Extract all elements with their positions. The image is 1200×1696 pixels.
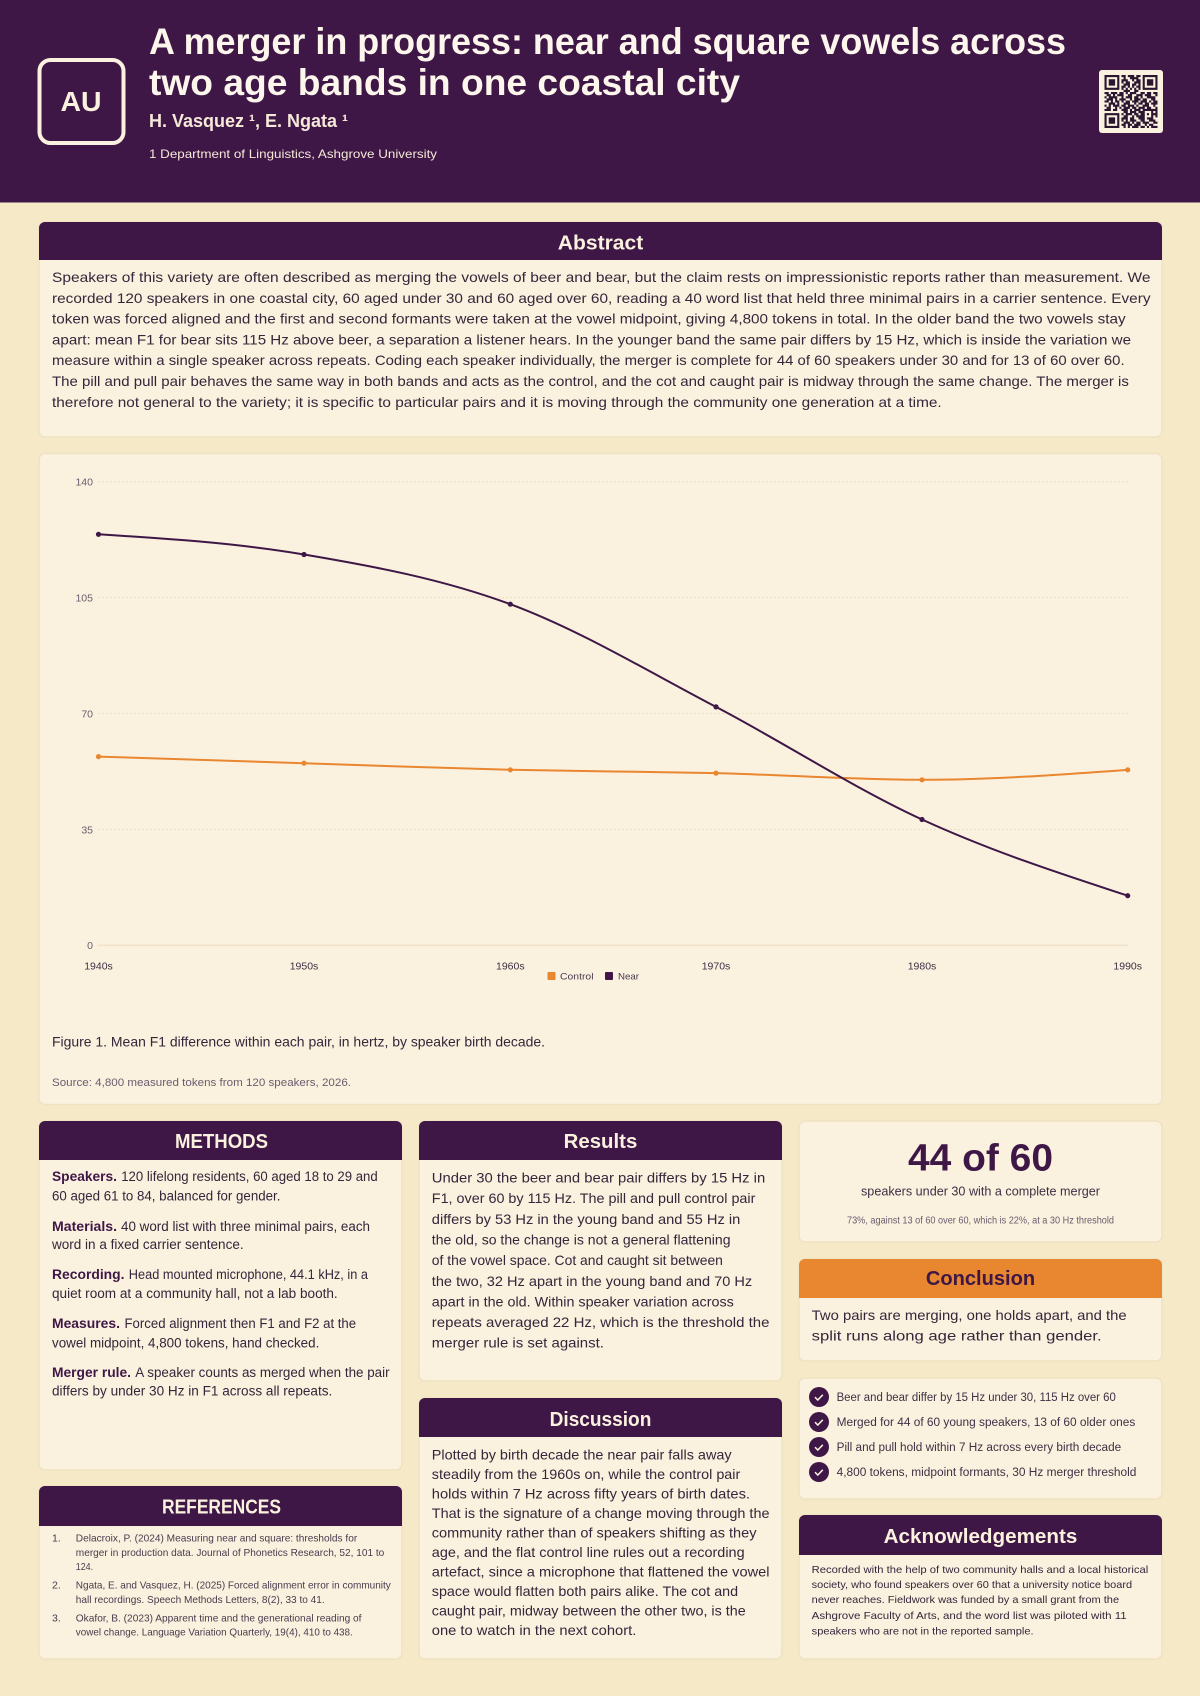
discussion text: caught pair, midway between the other two, is the	[432, 1603, 746, 1619]
y axis labels: 105	[75, 592, 93, 604]
x axis labels: 1980s	[908, 960, 936, 972]
title: two age bands in one coastal city	[149, 62, 740, 103]
panel: key statistic	[799, 1121, 1162, 1242]
panel: abstract	[39, 222, 1162, 437]
stat note: 73%, against 13 of 60 over 60, which is 22%, at a 30 Hz threshold	[847, 1216, 1114, 1226]
check item 2: Merged for 44 of 60 young speakers, 13 of 60 older ones	[837, 1417, 1136, 1429]
methods text: quiet room at a community hall, not a lab booth.	[52, 1286, 338, 1301]
acknowledgements text: never reaches. Fieldwork was funded by a small grant from the	[812, 1594, 1119, 1606]
heading: references: REFERENCES	[162, 1496, 281, 1518]
methods text: differs by under 30 Hz in F1 across all repeats.	[52, 1383, 332, 1398]
abstract text: The pill and pull pair behaves the same way in both bands and acts as the control, and the cot and caught pair is midway through the same change. The merger is	[52, 373, 1129, 389]
figure caption: Figure 1. Mean F1 difference within each pair, in hertz, by speaker birth decade.	[52, 1034, 545, 1050]
methods text: Head mounted microphone, 44.1 kHz, in a	[129, 1267, 368, 1282]
references list: 2.	[52, 1580, 61, 1592]
title: A merger in progress: near and square vowels across	[149, 21, 1066, 62]
methods text: Forced alignment then F1 and F2 at the	[124, 1316, 356, 1331]
discussion text: artefact, since a microphone that flattened the vowel	[432, 1564, 770, 1580]
acknowledgements text: Ashgrove Faculty of Arts, and the word list was piloted with 11	[812, 1610, 1127, 1622]
legend	[548, 972, 639, 982]
check item 3	[809, 1437, 1121, 1457]
discussion text: space would flatten both pairs alike. The cot and	[432, 1583, 738, 1599]
series: near	[96, 532, 1130, 898]
references list: 1.	[52, 1532, 61, 1544]
x axis labels: 1970s	[702, 960, 730, 972]
references list: Okafor, B. (2023) Apparent time and the generational reading of	[76, 1612, 362, 1624]
panel: discussion	[419, 1398, 782, 1659]
x axis labels	[84, 960, 1142, 972]
results text: merger rule is set against.	[432, 1335, 604, 1351]
authors: H. Vasquez ¹, E. Ngata ¹	[149, 111, 348, 131]
abstract text: Speakers of this variety are often described as merging the vowels of beer and bear, but the claim rests on impressionistic reports rather than measurement. We	[52, 269, 1151, 285]
panel: figure	[39, 454, 1162, 1104]
methods text: 120 lifelong residents, 60 aged 18 to 29 and	[121, 1169, 378, 1184]
references list: 3.	[52, 1612, 61, 1624]
y axis labels	[75, 476, 93, 952]
heading: results: Results	[564, 1131, 637, 1153]
methods text: Merger rule.	[52, 1365, 131, 1380]
conclusion text	[812, 1307, 1127, 1344]
discussion text: age, and the flat control line rules out a recording	[432, 1544, 745, 1560]
results text: F1, over 60 by 115 Hz. The pill and pull control pair	[432, 1190, 756, 1206]
y axis labels: 140	[75, 476, 93, 488]
abstract text: measure within a single speaker across repeats. Coding each speaker individually, the merger is complete for 44 of 60 speakers under 30 and for 13 of 60 over 60.	[52, 352, 1125, 368]
abstract text: token was forced aligned and the first and second formants were taken at the vowel midpoint, giving 4,800 tokens in total. In the older band the two vowels stay	[52, 311, 1126, 327]
methods text	[51, 1169, 390, 1398]
legend: Control	[560, 972, 594, 982]
results text: Under 30 the beer and bear pair differs by 15 Hz in	[432, 1170, 765, 1186]
discussion text	[432, 1447, 770, 1638]
discussion text: holds within 7 Hz across fifty years of birth dates.	[432, 1486, 750, 1502]
references list: hall recordings. Speech Methods Letters, 8(2), 33 to 41.	[76, 1594, 325, 1606]
panel: acknowledgements	[799, 1515, 1162, 1659]
conclusion text: split runs along age rather than gender.	[812, 1328, 1102, 1344]
y axis labels: 0	[87, 940, 93, 952]
x axis labels: 1990s	[1113, 960, 1142, 972]
check item 4: 4,800 tokens, midpoint formants, 30 Hz merger threshold	[837, 1467, 1136, 1479]
x axis labels: 1940s	[84, 960, 113, 972]
acknowledgements text: society, who found speakers over 60 that a university notice board	[812, 1579, 1132, 1591]
methods text: vowel midpoint, 4,800 tokens, hand checked.	[52, 1336, 319, 1351]
heading: abstract: Abstract	[558, 232, 644, 254]
series: control	[96, 754, 1130, 782]
acknowledgements text: speakers who are not in the reported sample.	[812, 1626, 1034, 1638]
abstract text: recorded 120 speakers in one coastal city, 60 aged under 30 and 60 aged over 60, reading a 40 word list that held three minimal pairs in a carrier sentence. Every	[52, 290, 1150, 306]
results text: differs by 53 Hz in the young band and 55 Hz in	[432, 1211, 740, 1227]
heading: conclusion: Conclusion	[926, 1268, 1035, 1290]
source note: Source: 4,800 measured tokens from 120 speakers, 2026.	[52, 1077, 351, 1089]
results text: of the vowel space. Cot and caught sit between	[432, 1252, 723, 1268]
discussion text: Plotted by birth decade the near pair falls away	[432, 1447, 732, 1463]
references list: merger in production data. Journal of Phonetics Research, 52, 101 to	[76, 1547, 384, 1559]
stat label: speakers under 30 with a complete merger	[861, 1184, 1100, 1198]
references list: 124.	[76, 1561, 93, 1573]
discussion text: one to watch in the next cohort.	[432, 1622, 636, 1638]
panel: references	[39, 1486, 402, 1659]
abstract text: therefore not general to the variety; it is specific to particular pairs and it is moving through the community one generation at a time.	[52, 394, 942, 410]
acknowledgements text: Recorded with the help of two community halls and a local historical	[812, 1564, 1148, 1576]
methods text: Measures.	[52, 1316, 120, 1331]
check item 2	[809, 1412, 1136, 1432]
panel: key findings checklist	[799, 1378, 1162, 1499]
acknowledgements text	[812, 1564, 1148, 1638]
methods text: Speakers.	[52, 1169, 117, 1184]
methods text: 40 word list with three minimal pairs, each	[121, 1219, 370, 1234]
discussion text: That is the signature of a change moving through the	[432, 1505, 770, 1521]
heading: methods: METHODS	[175, 1131, 268, 1153]
results text: the two, 32 Hz apart in the young band and 70 Hz	[432, 1273, 752, 1289]
references list: Delacroix, P. (2024) Measuring near and square: thresholds for	[76, 1532, 358, 1544]
x axis labels: 1950s	[290, 960, 318, 972]
check item 4	[809, 1462, 1136, 1482]
panel: methods	[39, 1121, 402, 1470]
references list: Ngata, E. and Vasquez, H. (2025) Forced alignment error in community	[76, 1580, 392, 1592]
check item 1: Beer and bear differ by 15 Hz under 30, 115 Hz over 60	[837, 1392, 1116, 1404]
conclusion text: Two pairs are merging, one holds apart, and the	[812, 1307, 1127, 1323]
check item 3: Pill and pull hold within 7 Hz across every birth decade	[837, 1442, 1121, 1454]
abstract text: apart: mean F1 for bear sits 115 Hz above beer, a separation a listener hears. In the younger band the same pair differs by 15 Hz, which is inside the variation we	[52, 331, 1131, 347]
x axis labels: 1960s	[496, 960, 525, 972]
results text: the old, so the change is not a general flattening	[432, 1232, 730, 1248]
title	[149, 21, 1066, 103]
stat value: 44 of 60	[908, 1138, 1053, 1180]
panel: conclusion	[799, 1259, 1162, 1361]
heading: discussion: Discussion	[550, 1409, 651, 1431]
QR code	[1099, 70, 1163, 133]
header banner	[0, 0, 1200, 202]
logo: AU	[40, 60, 124, 143]
check item 1	[809, 1387, 1116, 1407]
methods text: A speaker counts as merged when the pair	[135, 1365, 390, 1380]
affiliation: 1 Department of Linguistics, Ashgrove University	[149, 147, 437, 161]
methods text: word in a fixed carrier sentence.	[51, 1237, 244, 1252]
references list	[52, 1532, 392, 1639]
y axis labels: 35	[81, 824, 93, 836]
references list: vowel change. Language Variation Quarterly, 19(4), 410 to 438.	[76, 1627, 353, 1639]
y axis labels: 70	[81, 708, 93, 720]
methods text: 60 aged 61 to 84, balanced for gender.	[52, 1188, 280, 1203]
results text: apart in the old. Within speaker variation across	[432, 1293, 734, 1309]
legend: Near	[618, 972, 639, 982]
discussion text: steadily from the 1960s on, while the control pair	[432, 1466, 741, 1482]
panel: results	[419, 1121, 782, 1381]
results text: repeats averaged 22 Hz, which is the threshold the	[432, 1314, 770, 1330]
heading: acknowledgements: Acknowledgements	[884, 1526, 1077, 1548]
abstract text	[52, 269, 1151, 410]
discussion text: community rather than of speakers shifting as they	[432, 1525, 756, 1541]
methods text: Recording.	[52, 1267, 124, 1282]
logo: AU: AU	[60, 86, 102, 117]
results text	[432, 1170, 770, 1351]
methods text: Materials.	[52, 1219, 117, 1234]
line chart: mean F1 difference by birth decade	[75, 476, 1142, 982]
